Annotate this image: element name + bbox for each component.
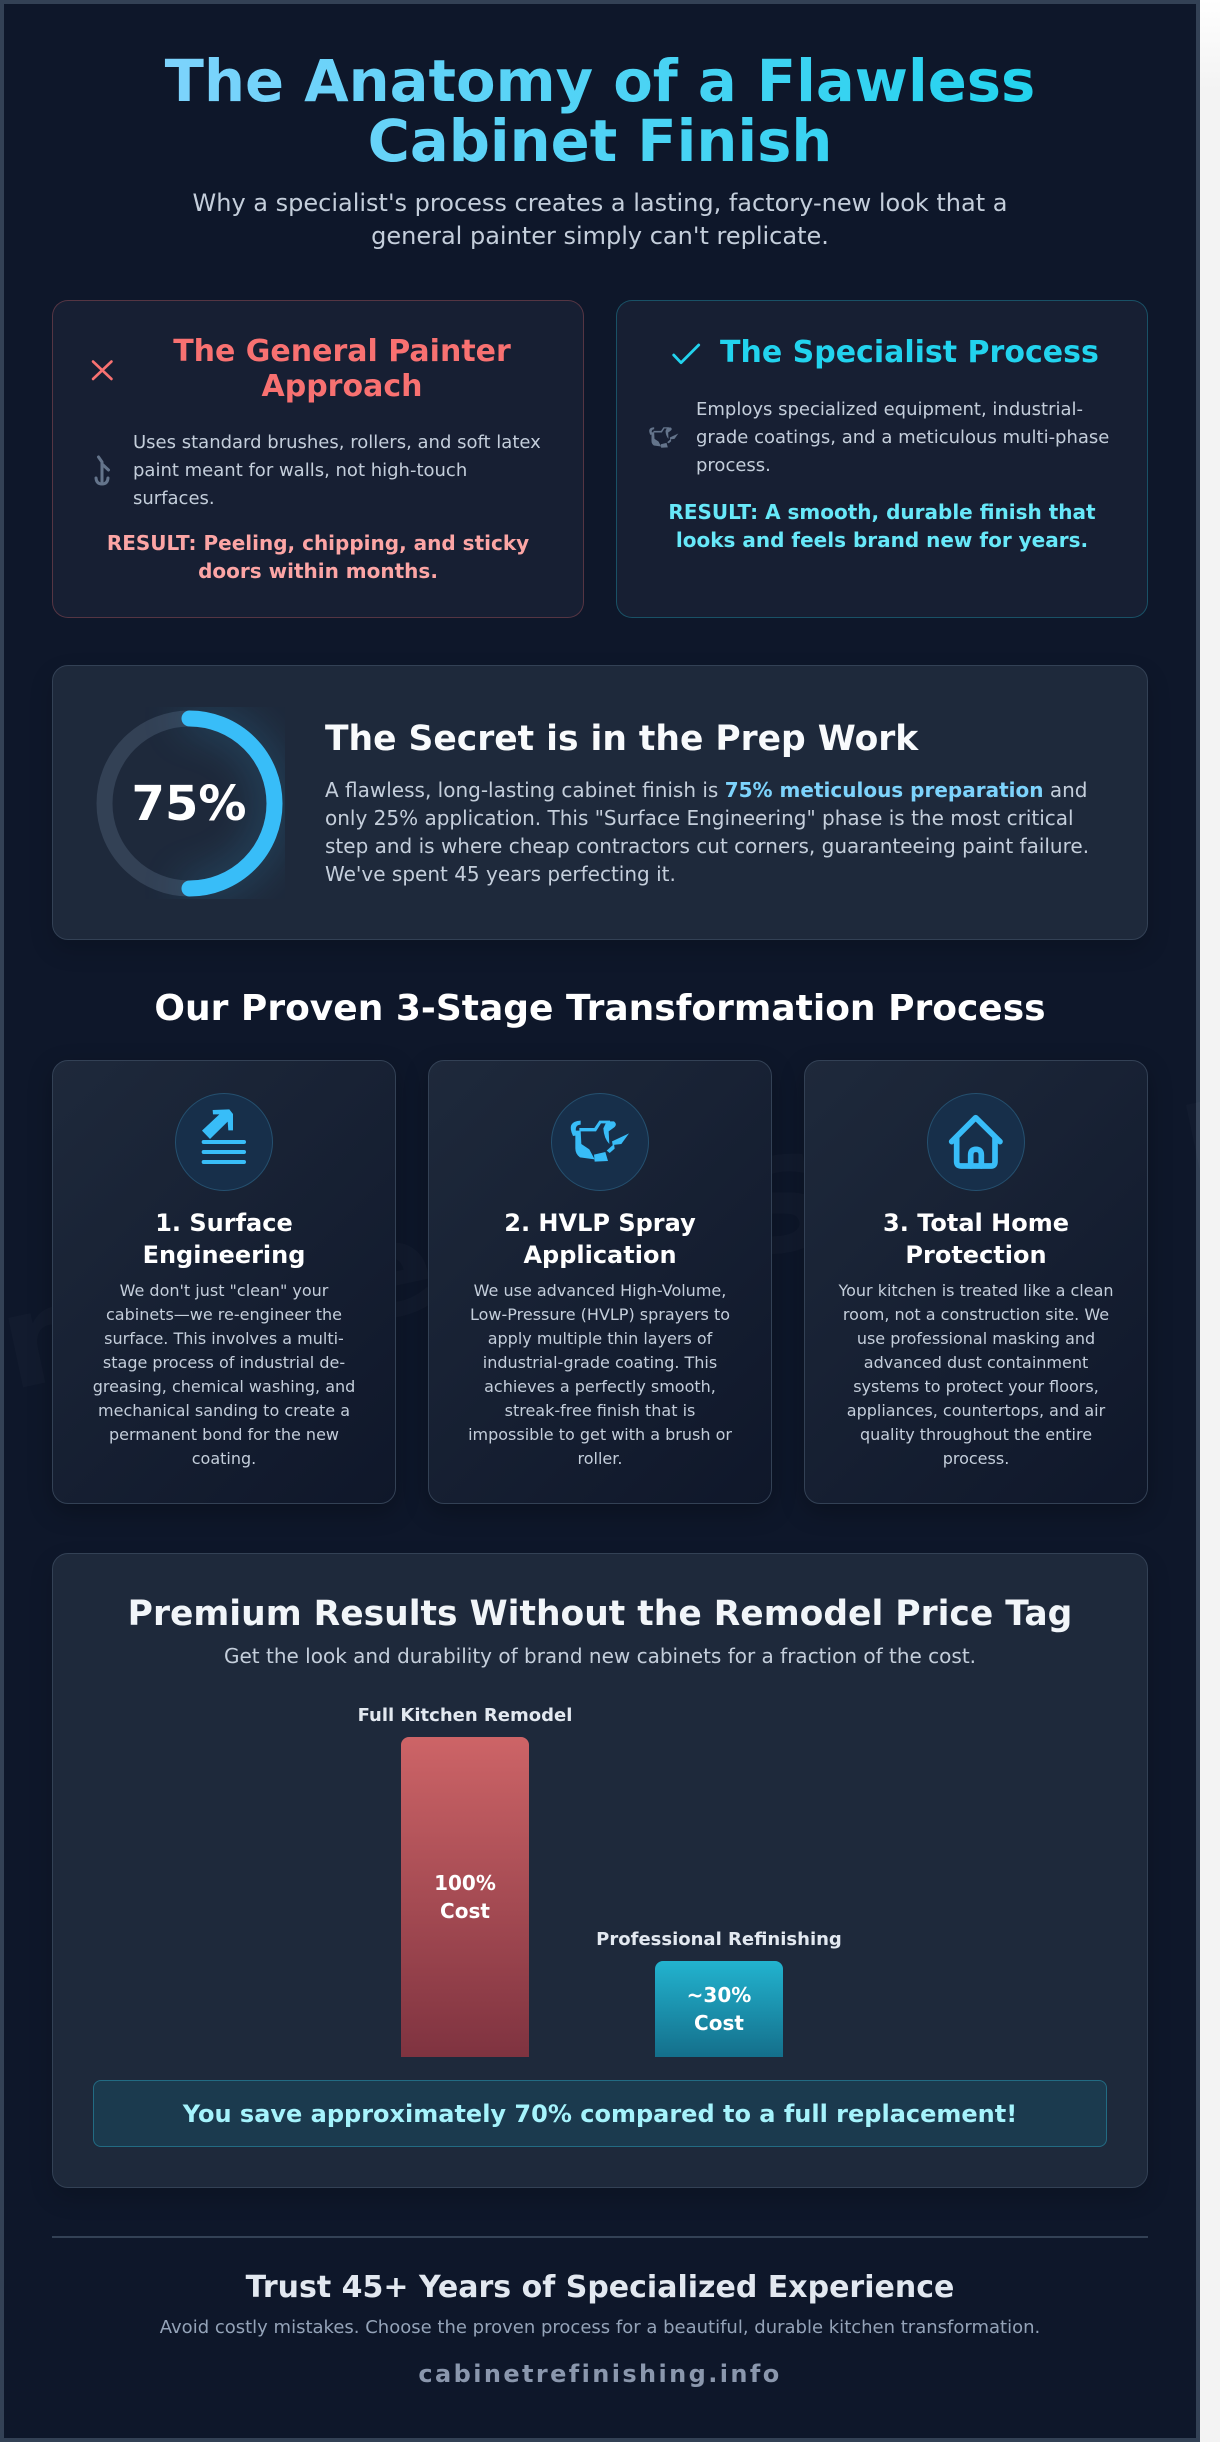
- panel: step 1 card: [52, 1060, 396, 1504]
- heading: cost comparison: Premium Results Without the Remodel Price Tag: [128, 1594, 1072, 1634]
- text: step 3: quality throughout the entire: [860, 1425, 1092, 1444]
- footer text: Avoid costly mistakes. Choose the proven process for a beautiful, durable kitchen transformation.: [160, 2317, 1040, 2338]
- icon: brush: [94, 455, 110, 486]
- heading: general painter: Approach: [262, 369, 422, 404]
- heading: specialist: The Specialist Process: [720, 335, 1099, 370]
- footer url: cabinetrefinishing.info: [418, 2360, 782, 2388]
- text: prep work: A flawless, long-lasting cabinet finish is 75% meticulous preparation and: [325, 778, 1087, 802]
- panel: specialist process: [616, 300, 1148, 618]
- bar: full remodel: [401, 1737, 529, 2057]
- faint background watermark letters: [0, 1090, 1200, 1420]
- text: step 3: Your kitchen is treated like a clean: [838, 1281, 1114, 1300]
- panel: general painter approach: [52, 300, 584, 618]
- heading: step 3: 3. Total Home: [883, 1209, 1069, 1237]
- icon: cross: [92, 360, 113, 380]
- result: specialist: looks and feels brand new for years.: [676, 528, 1088, 552]
- icon: surface engineering: [175, 1093, 273, 1191]
- result: specialist: RESULT: A smooth, durable finish that: [668, 500, 1096, 524]
- text: step 1: [93, 1281, 355, 1468]
- subtitle: general painter simply can't replicate.: [371, 222, 829, 250]
- text: step 3: [838, 1281, 1114, 1468]
- text: step 3: process.: [943, 1449, 1009, 1468]
- result: general painter: [107, 531, 529, 583]
- heading: step 1: 1. Surface: [155, 1209, 293, 1237]
- label: refinishing: Professional Refinishing: [596, 1929, 842, 1950]
- description: general painter: paint meant for walls, not high-touch: [133, 460, 467, 481]
- chart: 75 percent donut: [96, 707, 285, 899]
- description: general painter: surfaces.: [133, 488, 215, 509]
- title: Cabinet Finish: [368, 108, 832, 175]
- footer heading: Trust 45+ Years of Specialized Experience: [246, 2270, 954, 2305]
- text: step 2: industrial-grade coating. This: [483, 1353, 717, 1372]
- text: step 3: use professional masking and: [857, 1329, 1095, 1348]
- faint background watermark letters: S: [720, 1122, 843, 1290]
- text: step 3: appliances, countertops, and air: [847, 1401, 1105, 1420]
- bar: full remodel: 100%: [434, 1871, 496, 1895]
- text: step 2: We use advanced High-Volume,: [474, 1281, 726, 1300]
- text: step 2: roller.: [578, 1449, 622, 1468]
- heading: step 2: 2. HVLP Spray: [504, 1209, 696, 1237]
- heading: step 1: Engineering: [143, 1241, 305, 1269]
- heading: step 3: [883, 1209, 1069, 1269]
- heading: step 3: Protection: [905, 1241, 1047, 1269]
- donut value: 75%: [132, 776, 246, 832]
- heading: 3-stage process: Our Proven 3-Stage Transformation Process: [154, 988, 1046, 1029]
- heading: general painter: [173, 334, 511, 404]
- bar: refinishing: ~30%: [687, 1983, 751, 2007]
- heading: general painter: The General Painter: [173, 334, 511, 369]
- text: step 1: coating.: [192, 1449, 256, 1468]
- heading: step 1: [143, 1209, 305, 1269]
- text: prep work: [325, 778, 1089, 886]
- text: step 1: mechanical sanding to create a: [98, 1401, 350, 1420]
- text: prep work: only 25% application. This "Surface Engineering" phase is the most critical: [325, 806, 1074, 830]
- text: step 3: room, not a construction site. We: [843, 1305, 1109, 1324]
- text: step 2: impossible to get with a brush or: [468, 1425, 732, 1444]
- callout: savings: You save approximately 70% compared to a full replacement!: [183, 2100, 1017, 2128]
- result: general painter: RESULT: Peeling, chipping, and sticky: [107, 531, 529, 555]
- description: general painter: [133, 432, 541, 509]
- heading: step 2: Application: [523, 1241, 677, 1269]
- icon: spray gun small: [649, 427, 678, 448]
- panel: prep work: [52, 665, 1148, 940]
- description: general painter: Uses standard brushes, rollers, and soft latex: [133, 432, 541, 453]
- subtitle: [193, 189, 1007, 250]
- icon: check: [672, 344, 700, 364]
- text: step 3: advanced dust containment: [864, 1353, 1088, 1372]
- text: step 2: achieves a perfectly smooth,: [484, 1377, 716, 1396]
- icon: home: [927, 1093, 1025, 1191]
- subtitle: Why a specialist's process creates a lasting, factory-new look that a: [193, 189, 1007, 217]
- text: step 2: [468, 1281, 732, 1468]
- text: step 3: systems to protect your floors,: [853, 1377, 1099, 1396]
- bar chart: cost: [358, 1705, 842, 2057]
- description: specialist: [696, 399, 1109, 476]
- text: step 1: surface. This involves a multi-: [104, 1329, 344, 1348]
- label: full remodel: Full Kitchen Remodel: [358, 1705, 572, 1726]
- description: specialist: grade coatings, and a meticulous multi-phase: [696, 427, 1109, 448]
- title: [165, 52, 1035, 172]
- subtitle: cost comparison: Get the look and durability of brand new cabinets for a fraction of the cost.: [224, 1644, 976, 1668]
- heading: step 2: [504, 1209, 696, 1269]
- bar: refinishing: [655, 1961, 783, 2057]
- title: The Anatomy of a Flawless: [165, 48, 1035, 115]
- callout: savings: [93, 2080, 1107, 2147]
- description: specialist: process.: [696, 455, 771, 476]
- text: prep work: step and is where cheap contractors cut corners, guaranteeing paint failure.: [325, 834, 1089, 858]
- text: step 1: permanent bond for the new: [109, 1425, 339, 1444]
- text: prep work: We've spent 45 years perfecting it.: [325, 862, 676, 886]
- panel: cost comparison: [52, 1553, 1148, 2188]
- icon: hvlp spray gun: [551, 1093, 649, 1191]
- text: step 1: We don't just "clean" your: [120, 1281, 328, 1300]
- result: general painter: doors within months.: [198, 559, 438, 583]
- bar: refinishing: Cost: [694, 2011, 744, 2035]
- text: step 2: apply multiple thin layers of: [488, 1329, 712, 1348]
- description: specialist: Employs specialized equipment, industrial-: [696, 399, 1083, 420]
- result: specialist: [668, 500, 1096, 552]
- text: step 2: streak-free finish that is: [505, 1401, 695, 1420]
- text: step 1: cabinets—we re-engineer the: [106, 1305, 342, 1324]
- panel: step 2 card: [428, 1060, 772, 1504]
- bar: full remodel: Cost: [440, 1899, 490, 1923]
- heading: prep work: The Secret is in the Prep Work: [325, 719, 918, 759]
- text: step 1: greasing, chemical washing, and: [93, 1377, 355, 1396]
- text: step 2: Low-Pressure (HVLP) sprayers to: [470, 1305, 730, 1324]
- faint background watermark letters: e: [330, 1187, 448, 1355]
- panel: step 3 card: [804, 1060, 1148, 1504]
- text: step 1: stage process of industrial de-: [103, 1353, 345, 1372]
